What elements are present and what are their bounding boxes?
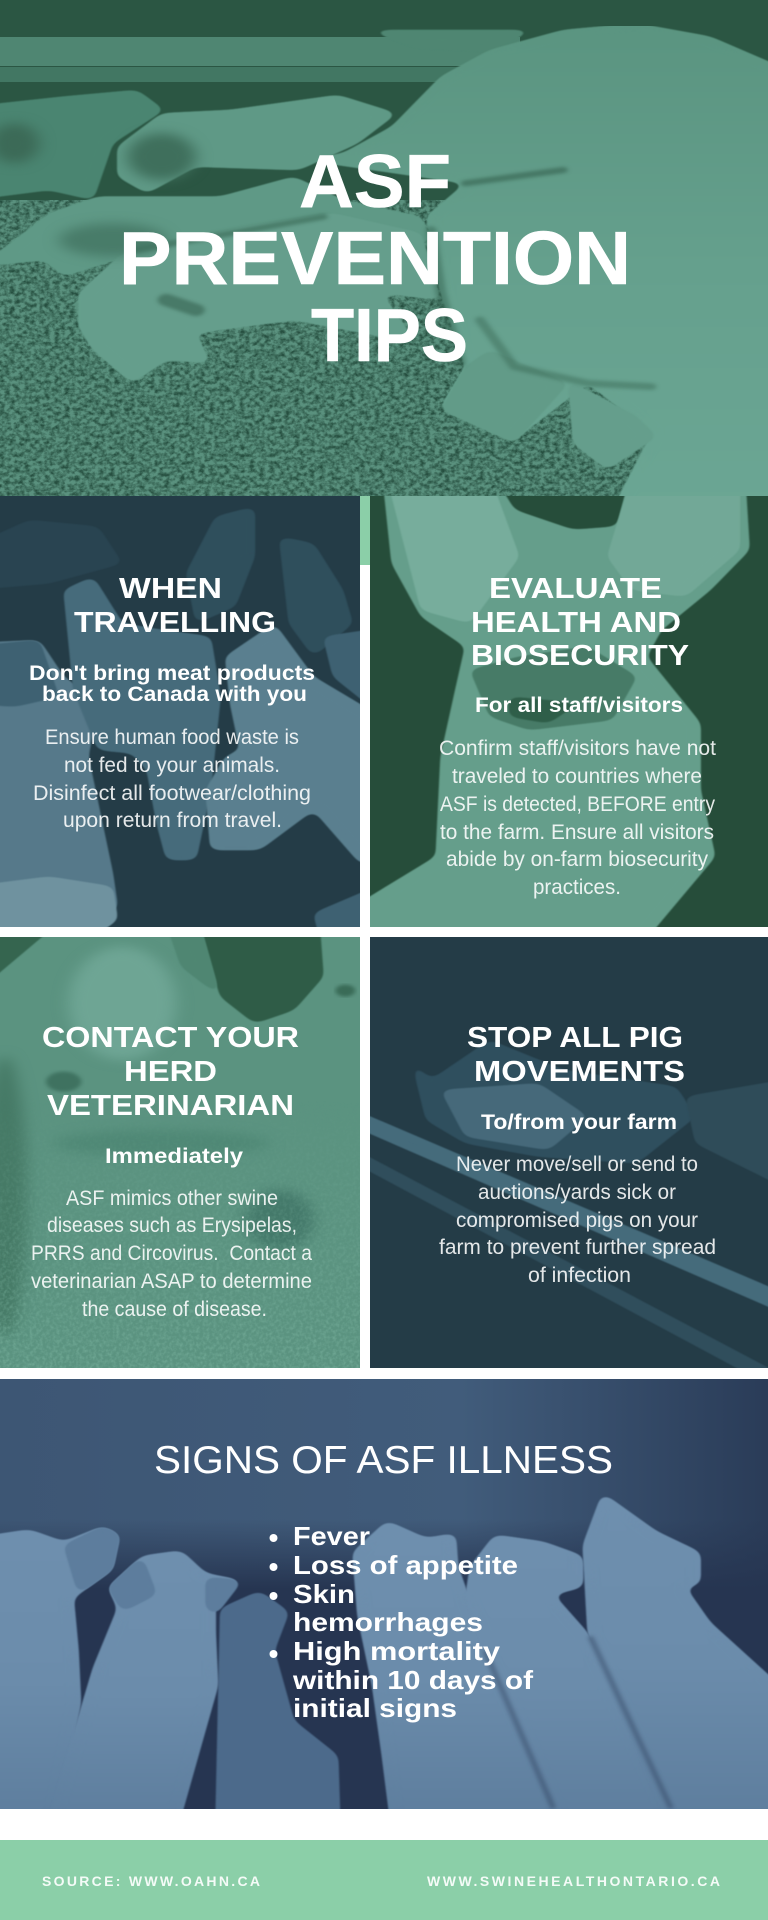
body text: auctions/yards sick or xyxy=(478,1181,676,1204)
panel: contact your herd veterinarian xyxy=(0,910,360,1368)
subheading: Immediately xyxy=(105,1145,243,1168)
heading xyxy=(42,1022,299,1122)
panel: hero photo with title xyxy=(0,0,768,520)
heading xyxy=(467,1022,685,1088)
body text xyxy=(31,1187,312,1321)
heading: SIGNS OF ASF ILLNESS xyxy=(154,1439,613,1482)
body text: practices. xyxy=(533,876,621,899)
subheading: To/from your farm xyxy=(481,1111,677,1134)
photo: pig face close-up xyxy=(0,910,360,1368)
heading: HERD xyxy=(124,1056,217,1088)
body text xyxy=(439,737,716,899)
body text: diseases such as Erysipelas, xyxy=(47,1214,297,1237)
body text xyxy=(33,726,311,832)
heading: STOP ALL PIG xyxy=(467,1022,683,1054)
heading: MOVEMENTS xyxy=(474,1056,685,1088)
body text: Never move/sell or send to xyxy=(456,1153,698,1176)
panel: evaluate health and biosecurity xyxy=(370,496,768,927)
heading xyxy=(471,573,689,672)
body text: not fed to your animals. xyxy=(64,754,280,777)
heading: HEALTH AND xyxy=(471,607,681,639)
title xyxy=(119,139,631,377)
body text: veterinarian ASAP to determine xyxy=(31,1270,312,1293)
hero photo: sow and piglets xyxy=(0,0,768,520)
footer xyxy=(0,1840,768,1920)
body text: compromised pigs on your xyxy=(456,1209,698,1232)
photo: piglets nursing xyxy=(0,1379,768,1833)
subheading: back to Canada with you xyxy=(42,683,307,706)
title: ASF xyxy=(299,139,451,223)
body text: traveled to countries where xyxy=(452,765,702,788)
heading: EVALUATE xyxy=(489,573,662,605)
panel: stop all pig movements xyxy=(370,937,768,1368)
photo: pig face xyxy=(370,496,768,927)
heading: CONTACT YOUR xyxy=(42,1022,299,1054)
subheading: Don't bring meat products xyxy=(29,662,315,685)
body text: farm to prevent further spread xyxy=(439,1236,716,1259)
subheading xyxy=(29,662,315,706)
accent strip xyxy=(360,496,370,565)
panel: when travelling xyxy=(0,496,360,927)
body text: PRRS and Circovirus. Contact a xyxy=(31,1242,312,1265)
symptom list: High mortality xyxy=(293,1636,501,1666)
symptom list: hemorrhages xyxy=(293,1607,483,1637)
body text: upon return from travel. xyxy=(63,809,282,832)
symptom list xyxy=(270,1521,533,1723)
heading: WHEN xyxy=(119,573,222,605)
symptom list: initial signs xyxy=(293,1693,457,1723)
body text: Confirm staff/visitors have not xyxy=(439,737,716,760)
title: TIPS xyxy=(311,293,468,377)
source label: SOURCE: WWW.OAHN.CA xyxy=(42,1873,260,1889)
website: WWW.SWINEHEALTHONTARIO.CA xyxy=(427,1873,720,1889)
photo: pigs from above xyxy=(0,496,360,927)
symptom list: Loss of appetite xyxy=(293,1550,518,1580)
heading xyxy=(74,573,276,639)
photo: pig behind rails xyxy=(370,937,768,1368)
title: PREVENTION xyxy=(119,216,631,300)
symptom list: within 10 days of xyxy=(292,1665,533,1695)
body text: the cause of disease. xyxy=(82,1298,267,1321)
body text: to the farm. Ensure all visitors xyxy=(440,821,714,844)
body text: of infection xyxy=(528,1264,631,1287)
heading: TRAVELLING xyxy=(74,607,276,639)
body text: Disinfect all footwear/clothing xyxy=(33,782,311,805)
heading: VETERINARIAN xyxy=(47,1090,294,1122)
body text: Ensure human food waste is xyxy=(45,726,299,749)
subheading: For all staff/visitors xyxy=(475,694,683,717)
body text: abide by on-farm biosecurity xyxy=(446,848,708,871)
body text: ASF is detected, BEFORE entry xyxy=(440,793,715,816)
symptom list: Fever xyxy=(293,1521,370,1551)
body text xyxy=(439,1153,716,1287)
body text: ASF mimics other swine xyxy=(66,1187,278,1210)
symptom list: Skin xyxy=(293,1579,355,1609)
heading: BIOSECURITY xyxy=(471,640,689,672)
panel: signs of ASF illness xyxy=(0,1379,768,1833)
